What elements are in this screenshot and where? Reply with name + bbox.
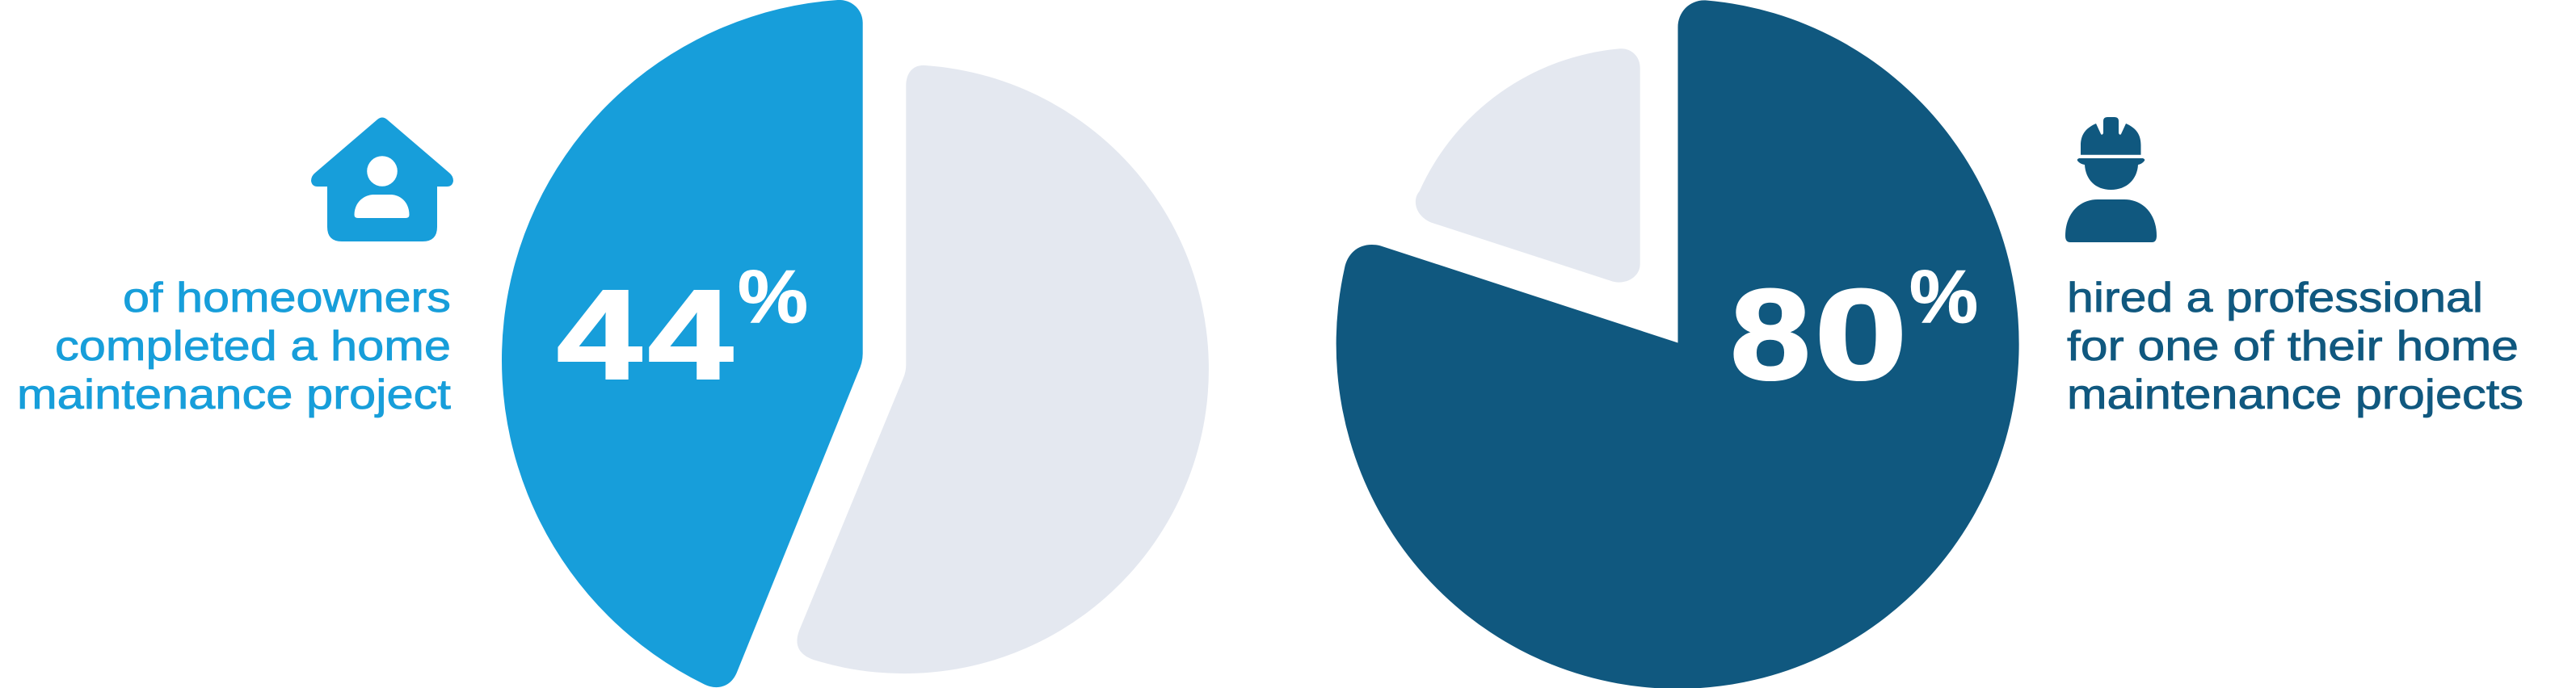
panel: homeowners completed a project	[17, 0, 1209, 687]
pie slice: remaining 20 percent	[1416, 48, 1640, 283]
stat: 80 percent	[1731, 255, 1978, 406]
pie slice: 80 percent	[1336, 0, 2019, 688]
stat: 44 percent: 44	[557, 263, 733, 405]
pie slice: remaining 56 percent	[797, 65, 1209, 673]
stat: 44 percent: %	[738, 255, 808, 339]
text: of homeowners completed a home maintenance project: maintenance project	[17, 371, 452, 418]
icon: house with person	[311, 118, 453, 241]
panel: hired a professional	[1336, 0, 2523, 688]
text: of homeowners completed a home maintenance project: of homeowners	[123, 275, 451, 321]
stat: 44 percent	[557, 255, 808, 405]
text: hired a professional for one of their home maintenance projects: for one of their home	[2067, 323, 2519, 370]
text: hired a professional for one of their home maintenance projects	[2067, 275, 2523, 418]
pie slice: 44 percent	[502, 0, 863, 687]
text: of homeowners completed a home maintenance project	[17, 275, 452, 418]
text: hired a professional for one of their home maintenance projects: hired a professional	[2067, 275, 2483, 321]
text: hired a professional for one of their home maintenance projects: maintenance projects	[2067, 371, 2523, 418]
text: of homeowners completed a home maintenance project: completed a home	[55, 323, 451, 370]
icon: construction worker	[2065, 117, 2157, 242]
stat: 80 percent: %	[1909, 255, 1978, 339]
stat: 80 percent: 0	[1815, 262, 1907, 406]
stat: 80 percent: 8	[1731, 262, 1810, 406]
